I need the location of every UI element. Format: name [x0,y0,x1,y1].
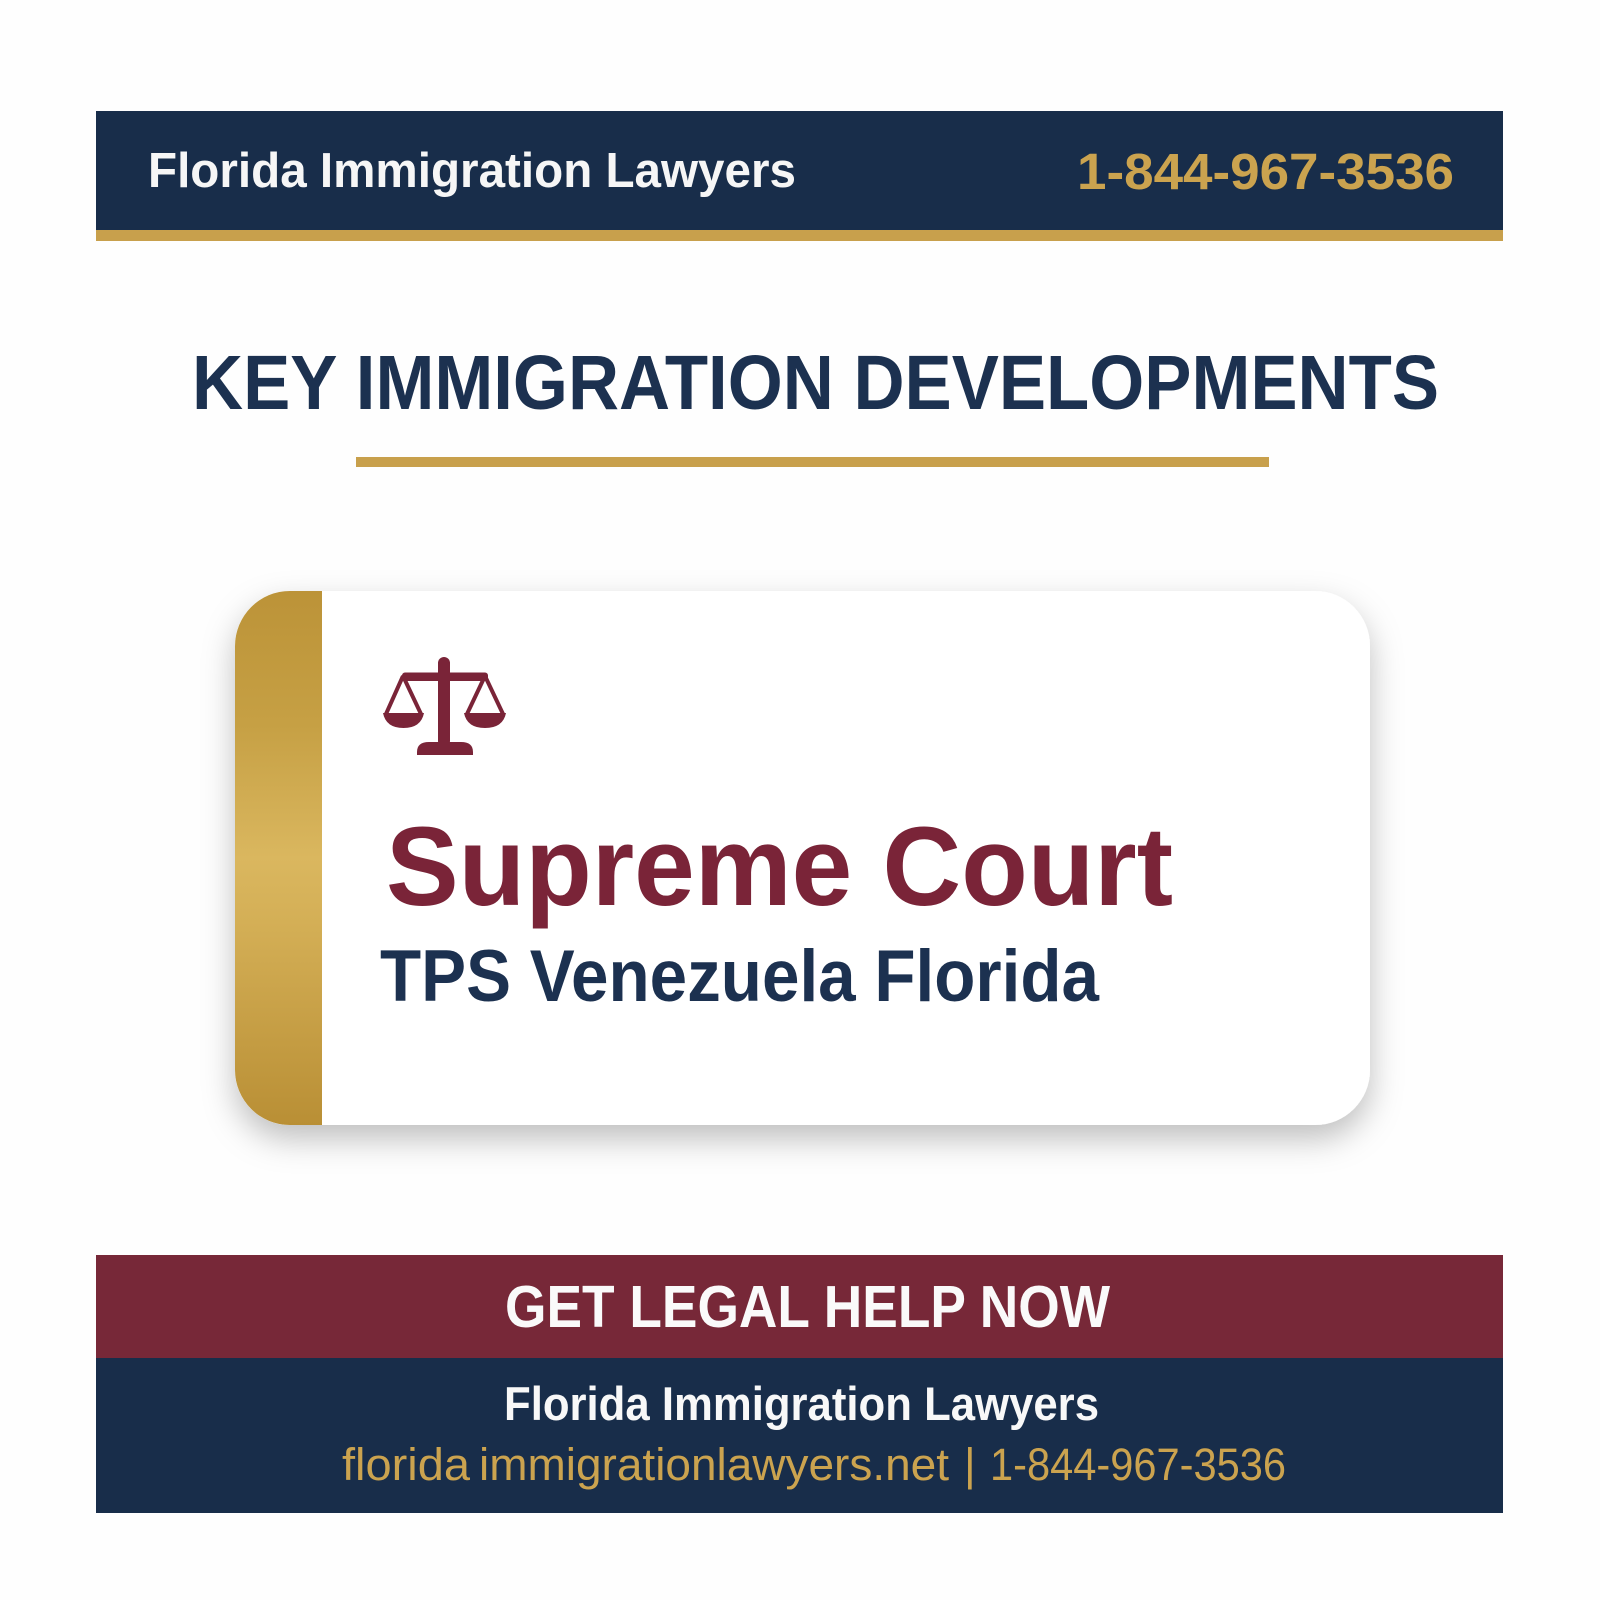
call to action text: GET LEGAL HELP NOW [505,1274,1110,1340]
footer website and phone: 1-844-967-3536 [990,1439,1286,1490]
footer contact panel [96,1358,1503,1513]
footer website and phone: immigrationlawyers.net [479,1439,950,1490]
footer website and phone [342,1439,1286,1490]
title underline [356,457,1269,467]
card gold accent bar [235,591,322,1125]
card subheading: TPS Venezuela Florida [380,936,1100,1017]
panel: supreme court card [235,591,1370,1125]
header bar [96,111,1503,241]
icon: scales of justice [383,657,506,755]
main title: KEY IMMIGRATION DEVELOPMENTS [192,340,1439,426]
footer website and phone: florida [342,1439,471,1490]
header phone number: 1-844-967-3536 [1077,143,1454,200]
card heading: Supreme Court [386,804,1173,929]
call to action band [96,1255,1503,1358]
header firm name: Florida Immigration Lawyers [148,144,796,198]
footer website and phone: | [964,1439,976,1490]
footer firm name: Florida Immigration Lawyers [504,1377,1099,1430]
